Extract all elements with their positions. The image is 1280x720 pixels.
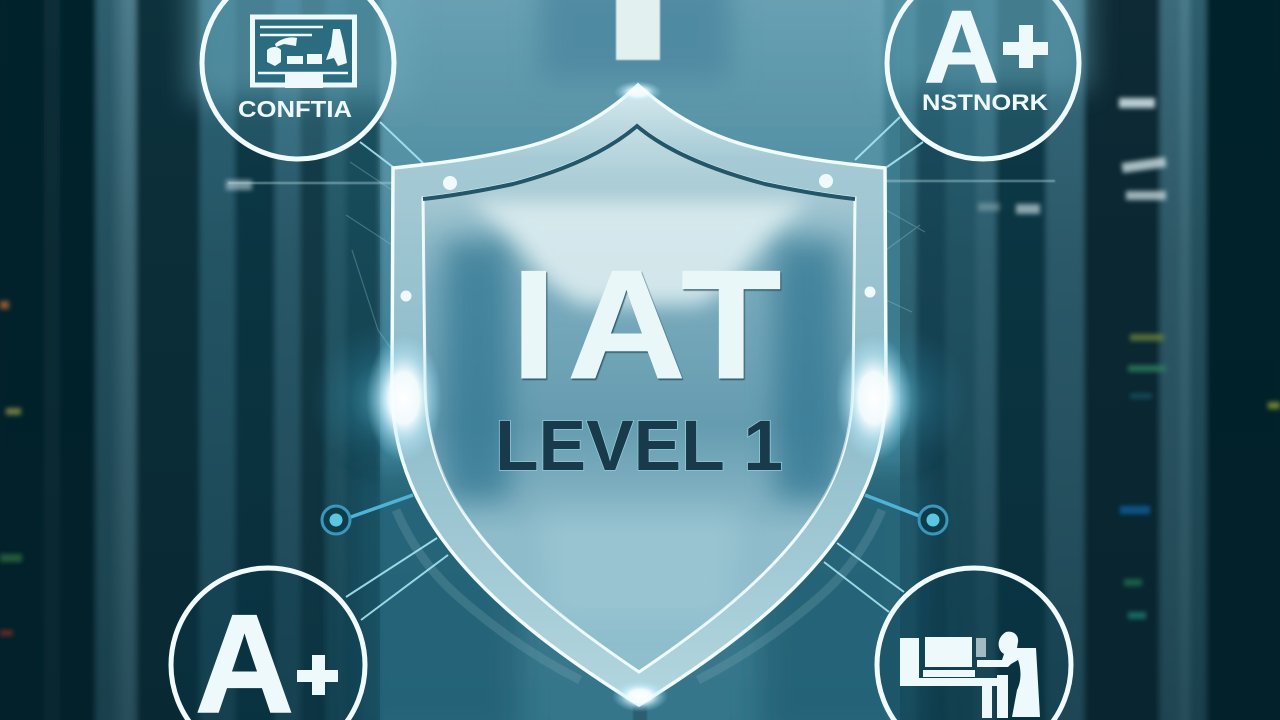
node: right dot (865, 495, 947, 534)
shield flares (366, 81, 912, 712)
monitor icon (252, 17, 354, 88)
rack lights (226, 98, 1166, 214)
technician icon (900, 632, 1040, 718)
connector lines (346, 117, 923, 620)
node: left dot (322, 495, 413, 534)
glow behind shield (308, 320, 970, 480)
faint network web (346, 162, 925, 350)
faint outer ring (396, 510, 882, 680)
shield rivets (400, 174, 876, 302)
lower floor shading (350, 470, 520, 720)
shield top dark edge (423, 126, 855, 199)
shield rim (392, 85, 886, 705)
upper rack glow (190, 0, 410, 100)
dark post below shield (633, 706, 647, 720)
badge: technician at workstation (877, 568, 1071, 720)
badge: A+ (171, 568, 365, 720)
shield (366, 81, 912, 712)
badge: A+ Network (887, 0, 1079, 159)
heading: IAT: IAT (511, 237, 781, 411)
badge label: NSTNORK (922, 90, 1048, 115)
bright ceiling light (616, 0, 660, 60)
badge label: CONFTIA (238, 96, 352, 122)
horizontal light beams (228, 181, 1055, 183)
plus sign (1003, 25, 1048, 68)
plus sign (297, 655, 338, 695)
shield inner shading (445, 200, 840, 620)
shield face (423, 125, 855, 672)
heading: LEVEL 1: LEVEL 1 (495, 407, 783, 486)
badge: CompTIA monitor (202, 0, 394, 159)
status LEDs (0, 301, 1280, 636)
